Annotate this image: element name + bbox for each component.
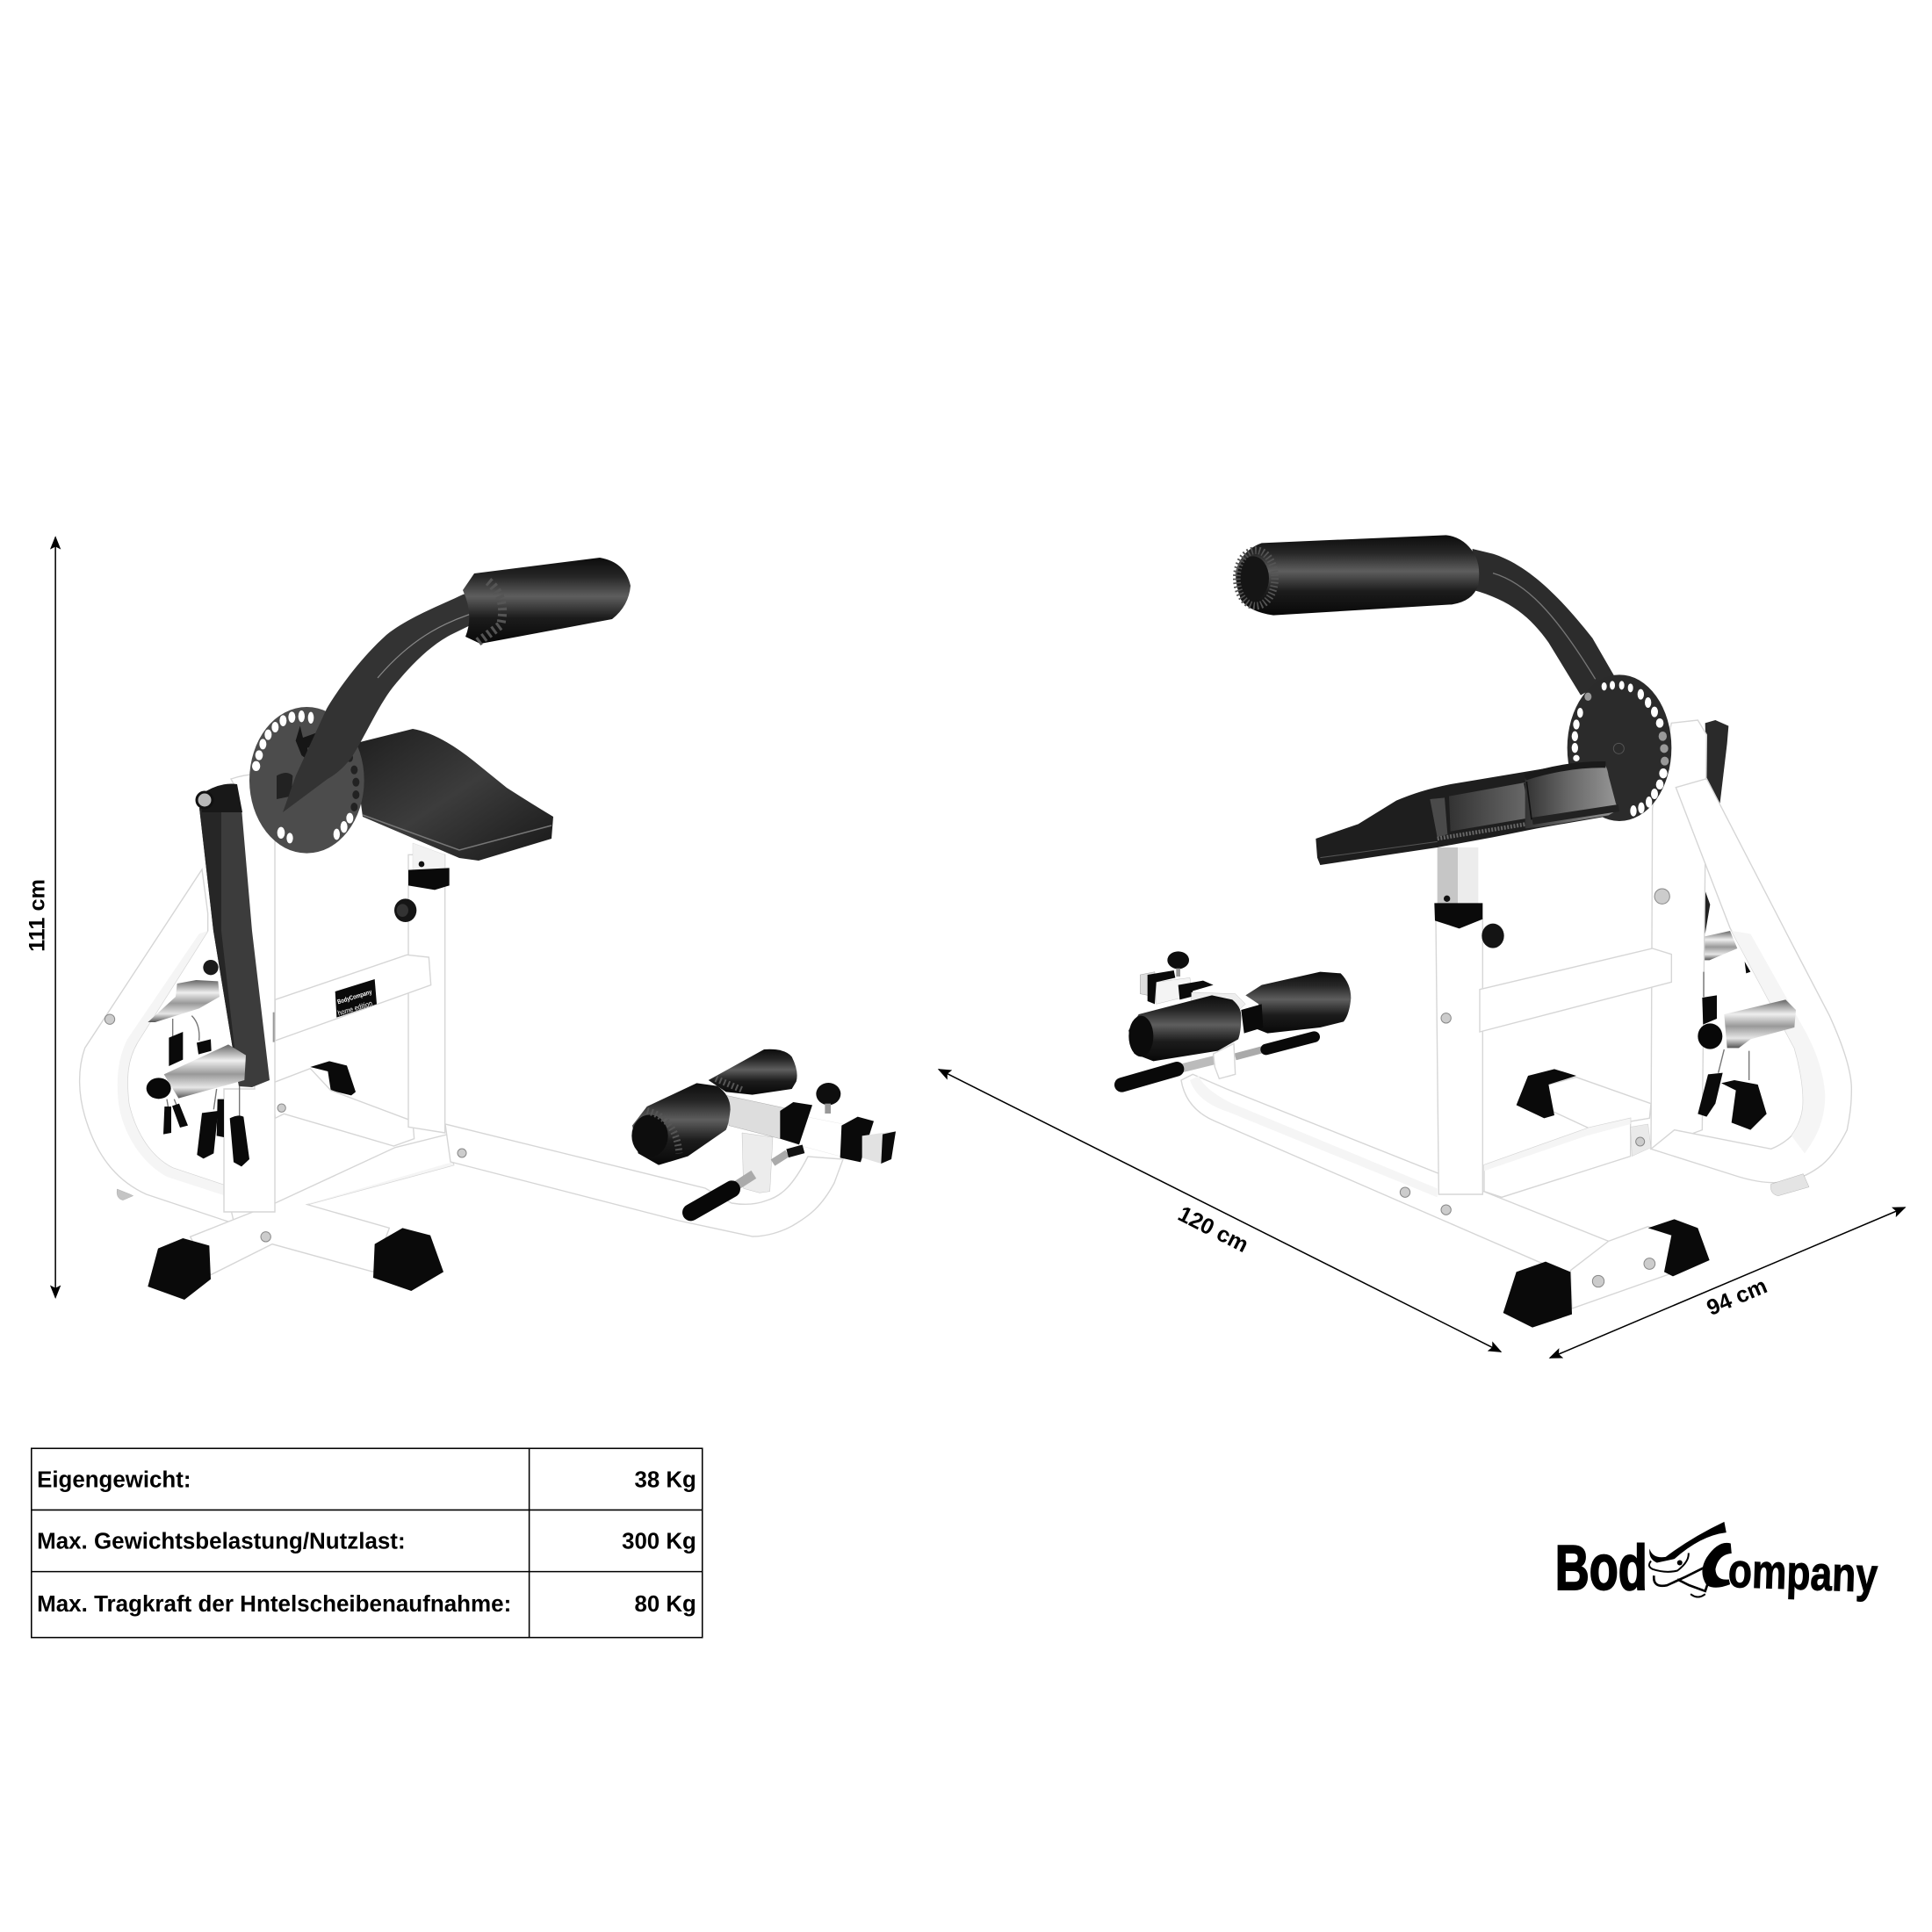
row: Eigengewicht	[37, 1467, 696, 1492]
row: Max. Gewichtsbelastung: 300 Kg	[622, 1530, 696, 1554]
rear rail	[272, 1069, 415, 1146]
dimensions, table and logo layer	[25, 537, 1905, 1638]
machine: left side view	[80, 558, 896, 1300]
back rubber foot	[310, 1061, 356, 1095]
rear upright column	[224, 775, 278, 1212]
seat post with collar and knob	[394, 843, 450, 922]
crossing bars	[191, 1135, 454, 1275]
machine: right rear view	[1121, 535, 1851, 1328]
handle	[1236, 1049, 1263, 1056]
upright	[1651, 720, 1706, 1149]
front upright column	[408, 854, 445, 1133]
adjustment disk	[249, 707, 364, 854]
logo icon: face	[1649, 1522, 1732, 1597]
leg pad assembly	[1121, 951, 1351, 1085]
logo word: Bod: Bod	[1555, 1532, 1647, 1604]
front handle and block	[1179, 1060, 1216, 1069]
row: Max. Gewichtsbelastung	[37, 1530, 696, 1554]
front base beam and feet	[1503, 1219, 1710, 1328]
row: Max. Tragkraft: Max. Tragkraft der Hntelscheibenaufnahme:	[37, 1592, 511, 1617]
side tube	[1651, 779, 1851, 1183]
long foot beam with curved end	[445, 1124, 843, 1236]
long base beam	[1181, 1074, 1609, 1276]
lever arm	[197, 783, 270, 1087]
cross brace with brand plate: BodyCompany	[336, 988, 373, 1006]
front weight horn with clips	[147, 1044, 249, 1166]
leg pad assembly	[631, 1049, 896, 1213]
rear weight horn	[1704, 931, 1737, 960]
lower beam	[1484, 1118, 1631, 1197]
logo word: ompany: ompany	[1727, 1543, 1878, 1603]
lever arm behind frame	[1705, 720, 1728, 934]
end pipe	[1770, 1174, 1809, 1196]
base beams	[1484, 931, 1750, 1197]
seat post, collar and knob	[1434, 847, 1504, 948]
bracket tube	[726, 1095, 784, 1139]
brace	[1480, 948, 1671, 1032]
adjustment disk	[1568, 674, 1671, 821]
front upright column	[1400, 919, 1482, 1215]
row: Eigengewicht: 38 Kg	[634, 1467, 696, 1492]
foot pipe brackets and knob	[1140, 972, 1155, 997]
rear roller	[1245, 972, 1351, 1034]
collars and knob	[780, 1102, 812, 1144]
front roller	[632, 1083, 731, 1165]
right upright with brace and side tube	[1480, 720, 1851, 1196]
bent arm	[1473, 549, 1614, 696]
width dimension arrow: 120 cm	[939, 1070, 1501, 1352]
cross brace with brand plate: home edition	[336, 998, 373, 1018]
front roller	[1128, 995, 1241, 1061]
bracket	[1631, 1124, 1651, 1157]
seat end overlapping disk	[1525, 762, 1618, 828]
curved rear frame tube	[80, 869, 234, 1223]
front weight horn with clips	[1698, 972, 1796, 1130]
curved arm	[283, 586, 492, 812]
row: Eigengewicht: Eigengewicht:	[37, 1467, 191, 1492]
back beam	[1548, 1078, 1651, 1128]
brand logo	[1555, 1522, 1878, 1604]
base frame: rail, upright and crossing bars	[148, 854, 454, 1300]
label: 111 cm: 111 cm	[25, 879, 50, 952]
row: Max. Gewichtsbelastung: Max. Gewichtsbelastung/Nutzlast:	[37, 1530, 406, 1554]
specification table	[31, 1448, 703, 1638]
cross brace with brand plate	[274, 955, 431, 1042]
label: 94 cm: 94 cm	[1704, 1273, 1770, 1321]
roller connector	[1241, 1004, 1263, 1034]
rear roller	[709, 1049, 797, 1095]
row: Max. Tragkraft: 80 Kg	[634, 1592, 696, 1617]
back roller pad	[1236, 535, 1479, 616]
handle	[773, 1153, 788, 1163]
beam bolt	[458, 1149, 466, 1157]
label: 120 cm: 120 cm	[1174, 1201, 1252, 1258]
depth dimension arrow: 94 cm	[1550, 1208, 1905, 1358]
seat pad	[1316, 762, 1618, 865]
back rubber foot	[1517, 1069, 1576, 1118]
rear weight horn with clips	[148, 960, 220, 1066]
rubber feet	[148, 1238, 211, 1300]
seat pad	[353, 729, 553, 861]
back roller pad	[463, 558, 631, 644]
